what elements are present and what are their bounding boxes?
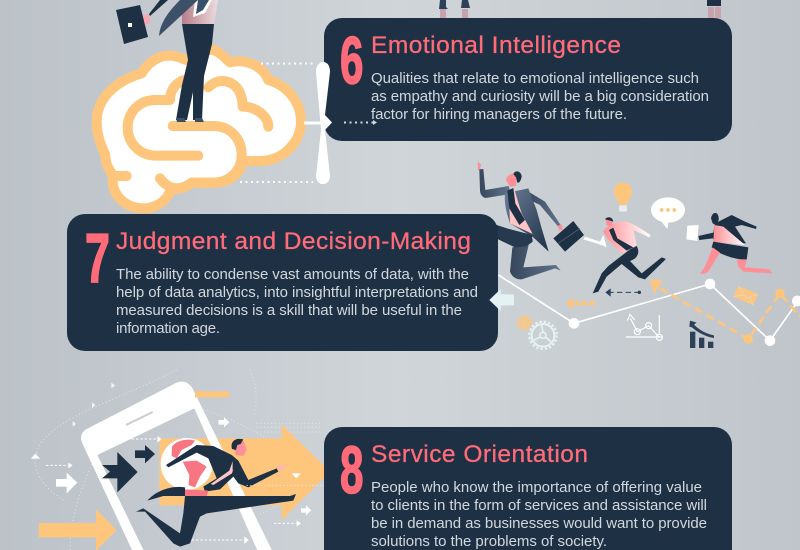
panel: emotional intelligence bbox=[324, 18, 732, 141]
globe bbox=[161, 438, 213, 490]
icon: light bulb bbox=[614, 183, 632, 212]
body text: measured decisions is a skill that will be useful in the bbox=[116, 302, 462, 319]
small orange arrow bbox=[195, 391, 231, 397]
orange dotted arrow bbox=[565, 298, 595, 309]
icon: gears bbox=[518, 316, 557, 349]
body text bbox=[116, 266, 478, 337]
body text: as empathy and curiosity will be a big consideration bbox=[371, 88, 709, 105]
body text bbox=[371, 70, 709, 123]
arrow pointing to panel bbox=[489, 289, 514, 311]
brain outline bbox=[97, 50, 301, 208]
icon: speech bubble bbox=[651, 197, 685, 229]
body text: information age. bbox=[116, 320, 220, 337]
body text: People who know the importance of offering value bbox=[371, 479, 702, 496]
running woman bbox=[686, 213, 772, 274]
running man with pink shirt bbox=[583, 217, 666, 293]
icon: growth chart bbox=[626, 314, 662, 340]
number 6: 6 bbox=[340, 24, 363, 98]
businessman bbox=[116, 0, 218, 122]
heading: Emotional Intelligence bbox=[371, 32, 621, 59]
body text bbox=[371, 479, 707, 550]
running businessman bbox=[440, 162, 584, 279]
number 7: 7 bbox=[85, 220, 110, 297]
brain folds bbox=[113, 79, 268, 188]
body text: solutions to the problems of society. bbox=[371, 533, 607, 550]
illustration: brain with businessman bbox=[97, 0, 301, 208]
lower orange arrow bbox=[39, 509, 117, 550]
body text: be in demand as businesses would want to provide bbox=[371, 515, 707, 532]
white arrows bbox=[31, 383, 311, 515]
illustration: businessman carrying globe out of a phone bbox=[31, 370, 333, 550]
dashed arrow bbox=[605, 288, 641, 297]
body text: help of data analytics, into insightful interpretations and bbox=[116, 284, 478, 301]
heading: Judgment and Decision-Making bbox=[116, 228, 471, 255]
icon: bar chart with arrow bbox=[689, 321, 714, 348]
phone bbox=[81, 382, 277, 550]
big orange arrow bbox=[159, 424, 330, 520]
body text: The ability to condense vast amounts of data, with the bbox=[116, 266, 469, 283]
dashed white arrows bbox=[46, 439, 297, 540]
panel: judgment and decision-making bbox=[67, 214, 498, 351]
dotted line into panel bbox=[247, 484, 333, 487]
businessman with globe bbox=[136, 439, 296, 547]
briefcase bbox=[553, 221, 584, 252]
icon: envelope bbox=[733, 286, 758, 305]
illustration: team running over a chart bbox=[440, 162, 800, 349]
panel: service orientation bbox=[324, 427, 732, 550]
body text: factor for hiring managers of the future. bbox=[371, 106, 627, 123]
dark arrows bbox=[102, 445, 155, 492]
icon: propeller connector bbox=[240, 62, 377, 184]
body text: to clients in the form of services and assistance will bbox=[371, 497, 707, 514]
illustration: feet standing on panel 6 bbox=[439, 0, 721, 18]
body text: Qualities that relate to emotional intelligence such bbox=[371, 70, 699, 87]
line chart bbox=[498, 275, 800, 346]
dotted orbit lines bbox=[35, 370, 322, 550]
heading: Service Orientation bbox=[371, 441, 588, 468]
number 8: 8 bbox=[340, 433, 363, 507]
